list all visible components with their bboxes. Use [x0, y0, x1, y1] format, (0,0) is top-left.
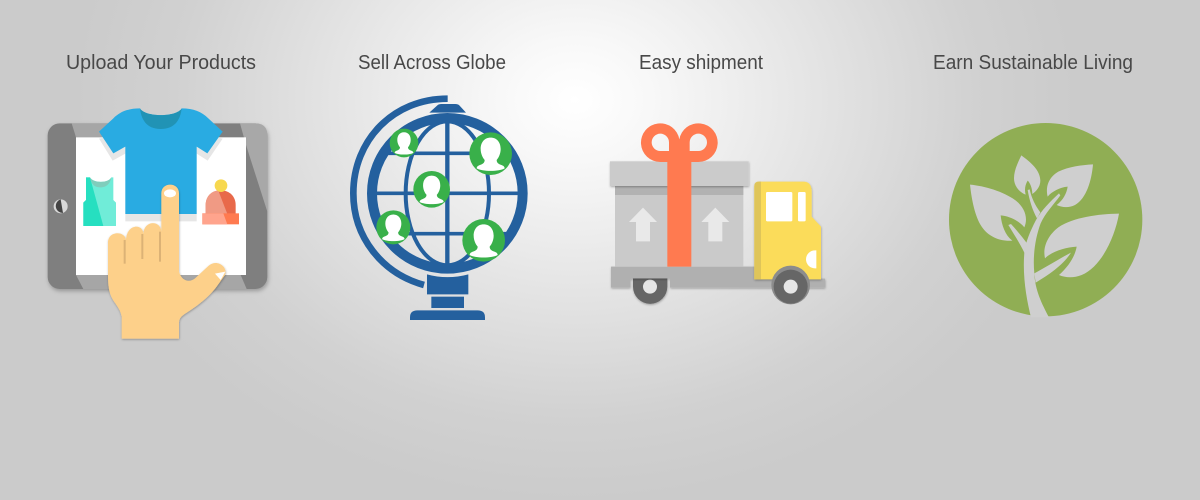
icon: sustainable plant in green circle [949, 123, 1142, 317]
tank top [83, 177, 116, 226]
icon: globe with user badges [353, 99, 523, 320]
t-shirt [99, 108, 223, 221]
front wheel [771, 266, 810, 304]
leaf: left [970, 185, 1026, 241]
user badge 1 [390, 129, 418, 157]
ribbon [641, 123, 718, 267]
truck cab [754, 182, 821, 279]
gift box [610, 161, 749, 267]
tablet body [48, 123, 267, 289]
beanie hat [202, 179, 239, 224]
truck bed [611, 267, 825, 288]
user badge 3 [413, 171, 450, 208]
globe frame arc [353, 99, 448, 285]
leaf: top [1014, 155, 1040, 195]
title: Easy shipment: Easy shipment [639, 52, 763, 74]
plant stem and branches [1008, 189, 1071, 317]
rear wheel [633, 278, 667, 304]
hand [108, 185, 226, 339]
user badge 4 [376, 210, 410, 244]
green circle [949, 123, 1142, 316]
user badge 2 [469, 132, 512, 175]
icon: delivery truck with gift box [610, 123, 825, 304]
tablet screen [76, 137, 246, 275]
globe top cap [429, 104, 466, 113]
icon: tablet with products and hand [48, 108, 267, 339]
leaf: upper right [1047, 164, 1093, 207]
title: Upload Your Products: Upload Your Products [66, 52, 256, 74]
globe stand [410, 274, 485, 320]
title: Sell Across Globe: Sell Across Globe [358, 52, 506, 74]
leaf: large right [1044, 214, 1119, 277]
user badge 5 [462, 219, 505, 262]
globe sphere [372, 118, 523, 269]
title: Earn Sustainable Living: Earn Sustainable Living [933, 52, 1133, 74]
